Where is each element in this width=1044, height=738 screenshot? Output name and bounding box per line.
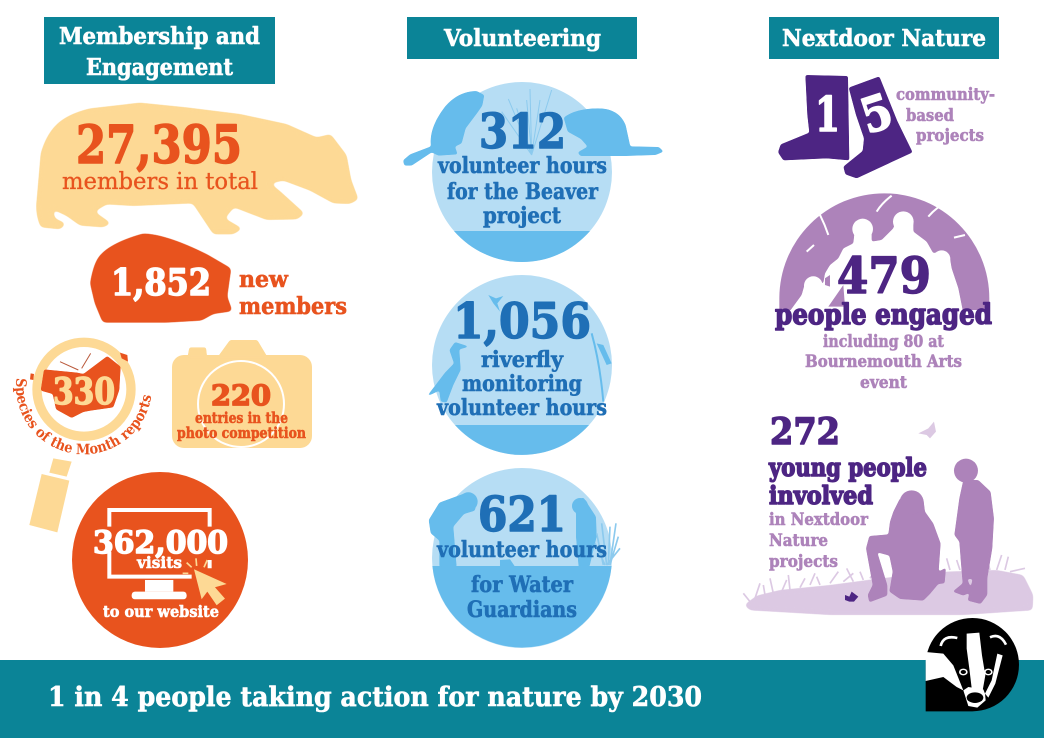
boots with community projects: 5 bbox=[854, 83, 900, 145]
young people scene: involved bbox=[769, 481, 873, 510]
hedgehog with new members bbox=[90, 233, 347, 323]
arch of people engaged: event bbox=[860, 373, 907, 392]
heading: membership and engagement: Membership and bbox=[59, 23, 260, 50]
boots with community projects: community- bbox=[896, 85, 995, 104]
beaver circle: project bbox=[483, 203, 562, 229]
heading: membership and engagement: Engagement bbox=[86, 54, 233, 81]
boots with community projects: 1 bbox=[815, 87, 840, 143]
riverfly circle: monitoring bbox=[462, 371, 582, 397]
website visits circle with monitor: 362,000 bbox=[93, 525, 228, 561]
badger silhouette with members total: 27,395 bbox=[76, 115, 242, 176]
beaver circle: volunteer hours bbox=[437, 153, 607, 179]
badger silhouette with members total bbox=[36, 103, 359, 234]
riverfly circle: riverfly bbox=[481, 347, 564, 373]
young people scene bbox=[743, 411, 1033, 615]
website visits circle with monitor bbox=[72, 472, 248, 648]
heading: volunteering: Volunteering bbox=[443, 25, 601, 52]
website visits circle with monitor: visits bbox=[136, 553, 182, 572]
panel: membership and engagement bbox=[12, 17, 358, 648]
icon: cursor bbox=[183, 558, 227, 605]
boots with community projects: projects bbox=[916, 126, 984, 145]
riverfly circle: volunteer hours bbox=[436, 395, 607, 421]
boots with community projects: based bbox=[906, 106, 954, 125]
water guardians circle: 621 bbox=[478, 487, 566, 543]
young people scene: in Nextdoor bbox=[769, 510, 868, 529]
badger logo bbox=[926, 618, 1019, 711]
footer band bbox=[0, 660, 1044, 738]
young people scene: young people bbox=[768, 453, 927, 482]
badger silhouette with members total: members in total bbox=[62, 169, 258, 195]
heading: nextdoor nature bbox=[769, 17, 999, 59]
camera with photo competition entries: photo competition bbox=[177, 424, 306, 442]
young people scene: projects bbox=[769, 552, 838, 571]
water guardians circle: Guardians bbox=[467, 597, 577, 623]
water guardians circle: volunteer hours bbox=[436, 537, 607, 563]
beaver circle bbox=[403, 82, 664, 262]
arch of people engaged: including 80 at bbox=[823, 332, 944, 351]
panel: nextdoor nature bbox=[743, 17, 1033, 615]
beaver circle: for the Beaver bbox=[447, 179, 598, 205]
heading: membership and engagement bbox=[44, 17, 275, 84]
magnifying glass with butterfly: Species of the Month reports bbox=[12, 378, 151, 454]
water guardians circle bbox=[429, 468, 620, 648]
arch of people engaged: people engaged bbox=[775, 298, 992, 331]
camera with photo competition entries: 220 bbox=[211, 379, 271, 412]
magnifying glass with butterfly: 330 bbox=[53, 371, 115, 413]
magnifying glass with butterfly bbox=[12, 338, 151, 532]
hedgehog with new members: new bbox=[239, 266, 289, 293]
young people scene: 272 bbox=[770, 411, 840, 453]
arch of people engaged bbox=[775, 193, 992, 392]
riverfly circle: 1,056 bbox=[453, 292, 591, 350]
footer slogan: 1 in 4 people taking action for nature by 2030 bbox=[48, 682, 702, 713]
camera with photo competition entries bbox=[172, 340, 312, 448]
icon: monitor bbox=[109, 510, 210, 599]
young people scene: Nature bbox=[769, 531, 828, 550]
camera with photo competition entries: entries in the bbox=[195, 409, 288, 427]
website visits circle with monitor: to our website bbox=[103, 602, 219, 621]
arch of people engaged: Bournemouth Arts bbox=[805, 352, 962, 371]
beaver circle: 312 bbox=[479, 104, 566, 160]
water guardians circle: for Water bbox=[471, 572, 573, 598]
heading: volunteering bbox=[407, 17, 637, 59]
hedgehog with new members: 1,852 bbox=[111, 262, 211, 304]
heading: nextdoor nature: Nextdoor Nature bbox=[782, 25, 986, 52]
hedgehog with new members: members bbox=[239, 293, 347, 320]
arch of people engaged: 479 bbox=[837, 246, 931, 305]
riverfly circle bbox=[427, 275, 612, 455]
panel: volunteering bbox=[403, 17, 664, 648]
boots with community projects bbox=[778, 75, 995, 178]
